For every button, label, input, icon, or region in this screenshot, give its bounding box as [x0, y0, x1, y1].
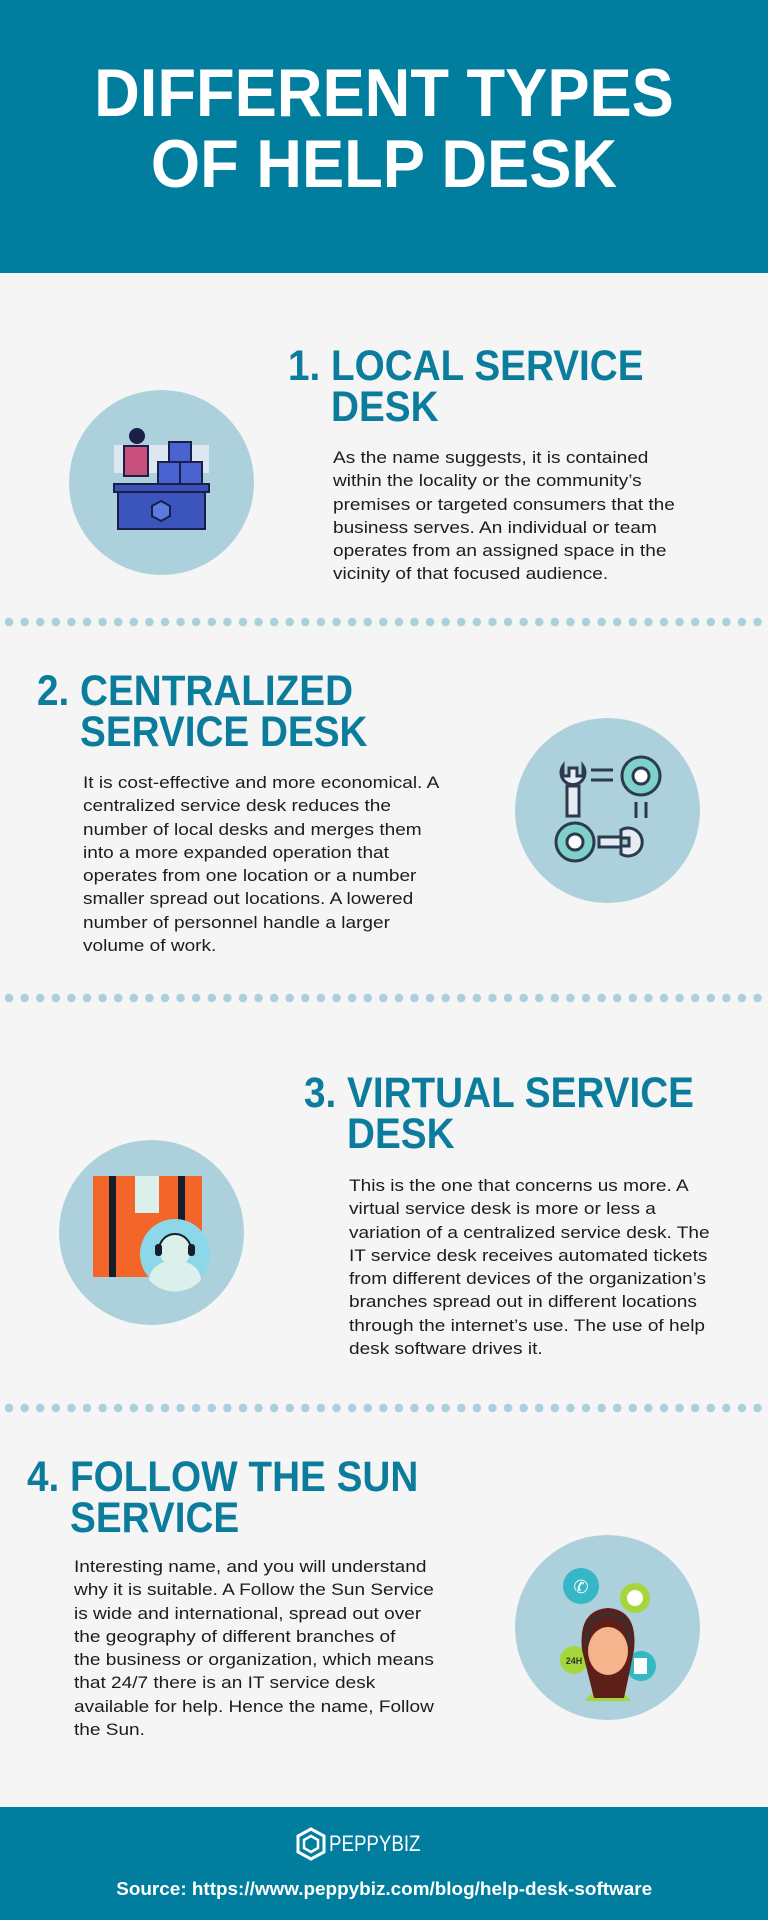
section 2 text: It is cost-effective and more economical. A	[83, 773, 439, 792]
section 3 text: variation of a centralized service desk. The	[349, 1223, 710, 1242]
section 2 text: volume of work.	[83, 936, 216, 955]
section 4 text: the Sun.	[74, 1720, 145, 1739]
footer	[0, 1807, 768, 1920]
logo	[296, 1827, 420, 1861]
section 1 text	[333, 448, 675, 583]
section 3 heading	[304, 1069, 694, 1158]
section 3 text: virtual service desk is more or less a	[349, 1199, 656, 1218]
icon: local desk	[69, 390, 254, 575]
section 3 text: desk software drives it.	[349, 1339, 543, 1358]
section 3 text: branches spread out in different locations	[349, 1292, 697, 1311]
section 2 text: number of personnel handle a larger	[83, 913, 390, 932]
section 4 text: why it is suitable. A Follow the Sun Service	[74, 1580, 434, 1599]
header banner	[0, 0, 768, 273]
section 3 heading: DESK	[347, 1110, 455, 1158]
section 1 text: vicinity of that focused audience.	[333, 564, 608, 583]
section 3 text: from different devices of the organization’s	[349, 1269, 706, 1288]
section 3 text: IT service desk receives automated tickets	[349, 1246, 707, 1265]
source: Source: https://www.peppybiz.com/blog/help-desk-software	[116, 1879, 652, 1899]
section 4 text	[74, 1557, 434, 1739]
icon: gears and wrenches	[515, 718, 700, 903]
icon: support agent	[515, 1535, 700, 1720]
section 2 text	[83, 773, 440, 955]
title	[94, 55, 674, 202]
icon: support agent: ✆	[573, 1577, 589, 1597]
section 2 heading: SERVICE DESK	[80, 708, 367, 756]
section 4 text: that 24/7 there is an IT service desk	[74, 1673, 375, 1692]
icon: virtual desk	[59, 1140, 244, 1325]
section 3 text	[349, 1176, 710, 1358]
section 2 text: smaller spread out locations. A lowered	[83, 889, 413, 908]
section 2 text: into a more expanded operation that	[83, 843, 389, 862]
section 4 heading: SERVICE	[70, 1494, 239, 1542]
section 4 heading	[27, 1453, 418, 1542]
section 2 heading	[37, 667, 367, 756]
section 1 text: within the locality or the community’s	[333, 471, 642, 490]
section 3 text: through the internet’s use. The use of help	[349, 1316, 705, 1335]
section 4 text: the business or organization, which means	[74, 1650, 434, 1669]
section 1 heading: DESK	[331, 383, 439, 431]
section 1 text: As the name suggests, it is contained	[333, 448, 648, 467]
section 2 text: operates from one location or a number	[83, 866, 416, 885]
section 2 heading: 2. CENTRALIZED	[37, 667, 353, 715]
section 3 heading: 3. VIRTUAL SERVICE	[304, 1069, 694, 1117]
section 1 text: premises or targeted consumers that the	[333, 495, 675, 514]
section 4 heading: 4. FOLLOW THE SUN	[27, 1453, 418, 1501]
section 4 text: is wide and international, spread out over	[74, 1604, 421, 1623]
section 2 text: number of local desks and merges them	[83, 820, 422, 839]
section 1 heading	[288, 342, 644, 431]
title: OF HELP DESK	[151, 126, 617, 202]
section 4 text: the geography of different branches of	[74, 1627, 395, 1646]
logo: PEPPYBIZ	[329, 1831, 420, 1856]
title: DIFFERENT TYPES	[94, 55, 674, 131]
section 1 text: operates from an assigned space in the	[333, 541, 666, 560]
section 1 heading: 1. LOCAL SERVICE	[288, 342, 644, 390]
section 1 text: business serves. An individual or team	[333, 518, 657, 537]
section 2 text: centralized service desk reduces the	[83, 796, 391, 815]
section 4 text: Interesting name, and you will understand	[74, 1557, 426, 1576]
section 4 text: available for help. Hence the name, Follow	[74, 1697, 434, 1716]
section 3 text: This is the one that concerns us more. A	[349, 1176, 689, 1195]
icon: support agent: 24H	[566, 1656, 582, 1666]
